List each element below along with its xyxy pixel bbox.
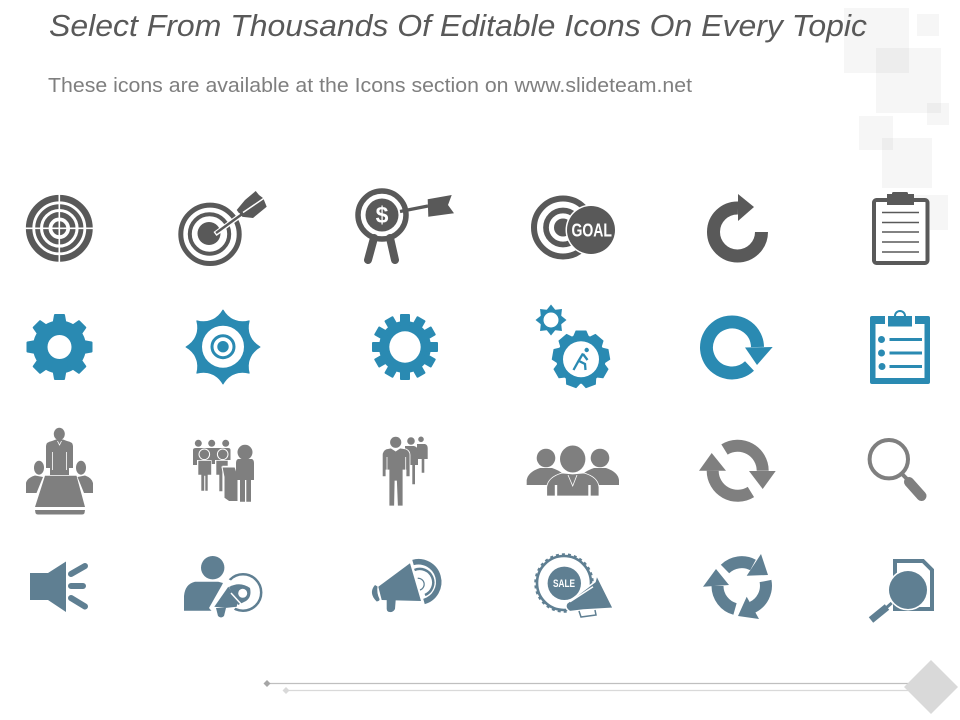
icon: document with magnifier <box>871 561 932 620</box>
icon: clockwise arrow <box>714 194 762 256</box>
title: Select From Thousands Of Editable Icons On Every Topic <box>49 9 867 43</box>
icon: people group with presenter <box>193 440 254 502</box>
icon: speaker <box>30 562 85 612</box>
footer lines with diamonds <box>264 660 958 714</box>
icon: goal target: GOAL <box>572 220 612 241</box>
icon: three circular arrows <box>703 554 768 619</box>
icon: person with megaphone <box>184 556 261 618</box>
icon: three person team <box>527 446 619 496</box>
icon: three businessmen in line <box>382 436 428 506</box>
icon: target with arrow <box>181 191 267 264</box>
icon: blue gear solid <box>28 315 92 379</box>
icon: gray sync arrows <box>699 446 776 496</box>
icon: sale badge with megaphone <box>536 554 613 617</box>
icon: blue refresh arrow <box>707 322 773 373</box>
icon: crosshair target <box>25 194 94 263</box>
icon: goal target <box>534 198 616 256</box>
icon: magnifying glass <box>870 440 922 496</box>
icon: dollar target with dart: $ <box>376 202 389 228</box>
icon: blue gear with many teeth <box>372 314 438 380</box>
icon: sale badge with megaphone: SALE <box>553 578 575 590</box>
icon: megaphone with sound waves <box>372 562 439 612</box>
icon: blue checklist clipboard <box>870 311 930 384</box>
decorative squares cluster <box>844 8 949 230</box>
subtitle: These icons are available at the Icons section on www.slideteam.net <box>48 75 692 97</box>
icon: dollar target with dart <box>358 191 454 260</box>
icon: blue scalloped gear with target <box>186 310 260 384</box>
icon: boardroom meeting <box>26 428 93 514</box>
icon: clipboard <box>874 192 928 263</box>
icon: two gears with walking person <box>536 304 610 389</box>
